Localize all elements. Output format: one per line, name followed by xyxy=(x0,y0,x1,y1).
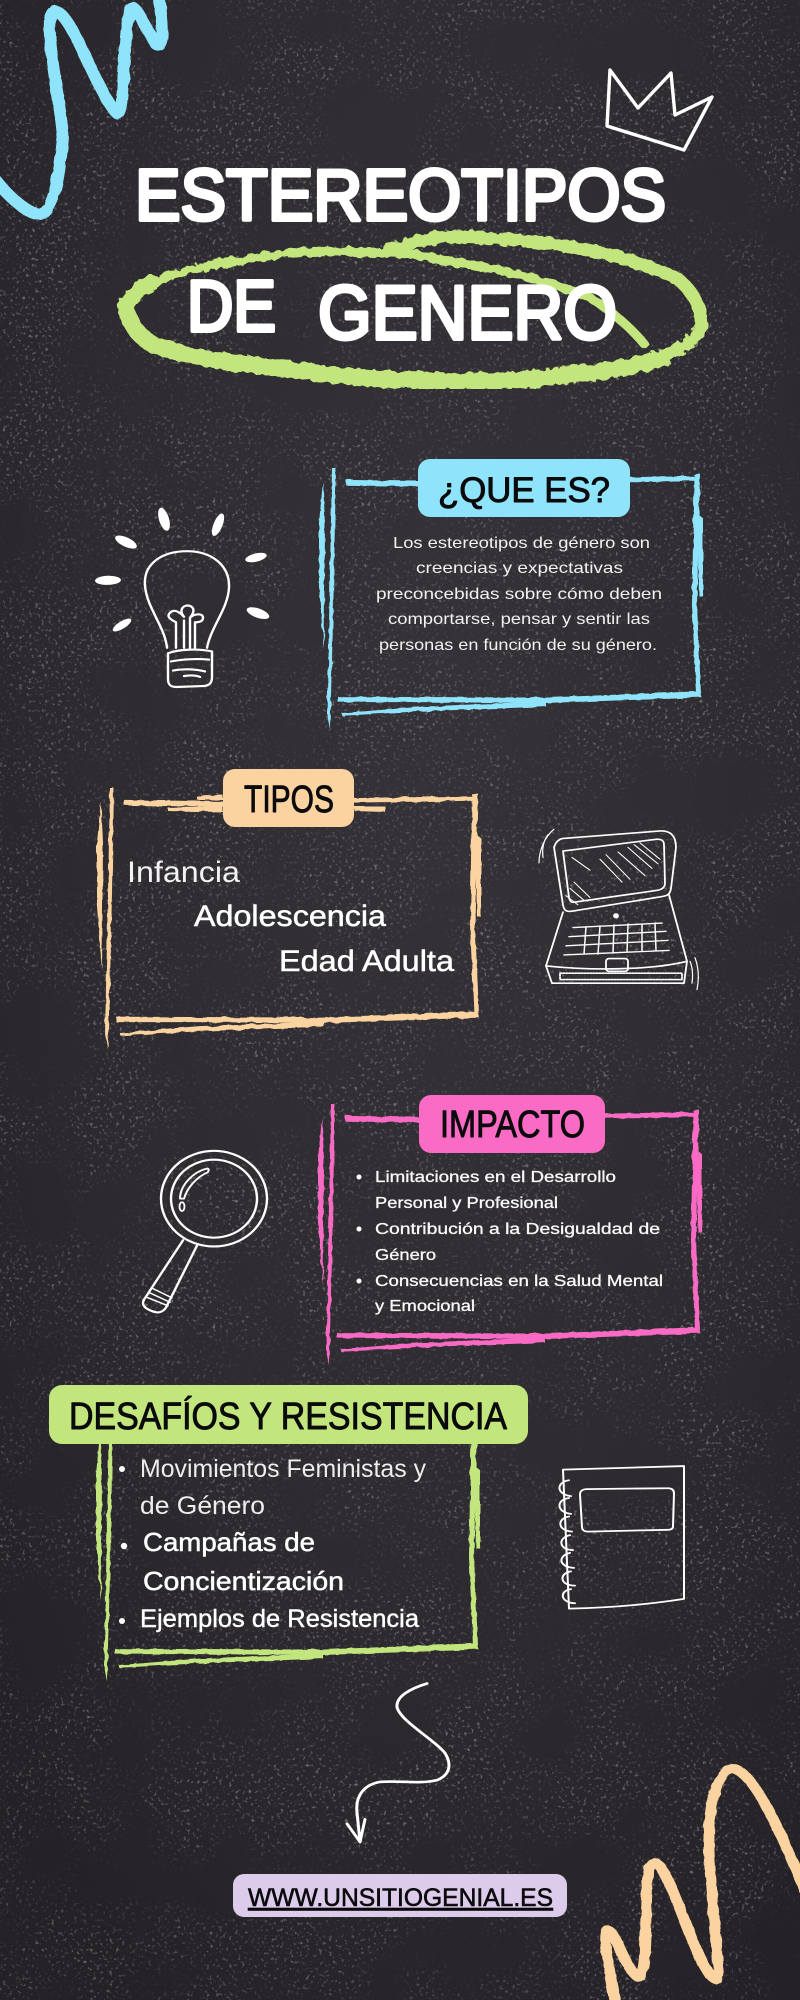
orange sketched frame xyxy=(97,788,481,1049)
icon: crown xyxy=(607,70,712,150)
arrow: pointing down to website xyxy=(347,1683,449,1842)
icon: notebook xyxy=(559,1466,684,1609)
decorative orange squiggle xyxy=(606,1769,800,2000)
type: Adolescencia: Adolescencia xyxy=(194,900,386,933)
blue sketched frame xyxy=(319,468,703,729)
badge: impacto xyxy=(419,1095,605,1153)
description text xyxy=(376,535,662,654)
title: ESTEREOTIPOS: ESTEREOTIPOS xyxy=(135,156,666,236)
heading: impacto: IMPACTO xyxy=(440,1104,585,1146)
icon: magnifying glass xyxy=(143,1151,267,1312)
panel: desafios y resistencia xyxy=(49,1385,528,1681)
title: DE GENERO: GENERO xyxy=(318,271,617,356)
impact bullet list: Contribución a la Desigualdad de xyxy=(375,1221,660,1238)
badge: que es xyxy=(418,459,630,517)
impact bullet list: Limitaciones en el Desarrollo xyxy=(375,1169,616,1186)
impact bullet list: Personal y Profesional xyxy=(375,1195,558,1212)
pink sketched frame xyxy=(318,1104,702,1365)
impact bullet list: Género xyxy=(375,1247,436,1264)
panel: impacto xyxy=(318,1095,702,1365)
description text: preconcebidas sobre cómo deben xyxy=(376,586,662,603)
description text: creencias y expectativas xyxy=(416,560,623,577)
title: DE GENERO: DE xyxy=(187,267,276,347)
title highlight: green scribbled ellipse xyxy=(126,236,701,381)
impact bullet list xyxy=(357,1169,663,1315)
heading: tipos: TIPOS xyxy=(244,779,334,821)
website url: WWW.UNSITIOGENIAL.ES xyxy=(248,1884,553,1912)
green sketched frame xyxy=(96,1420,480,1681)
impact bullet list: y Emocional xyxy=(375,1298,475,1315)
icon: light bulb xyxy=(95,507,271,687)
challenges bullet list xyxy=(119,1455,426,1633)
heading: desafios: DESAFÍOS Y RESISTENCIA xyxy=(69,1395,508,1438)
heading: que es: ¿QUE ES? xyxy=(438,471,610,510)
challenges bullet list: Movimientos Feministas y xyxy=(140,1455,426,1483)
challenges bullet list: Ejemplos de Resistencia xyxy=(140,1605,419,1633)
panel: que es xyxy=(319,459,703,729)
description text: Los estereotipos de género son xyxy=(393,535,650,552)
type: Infancia: Infancia xyxy=(127,856,240,889)
challenges bullet list: Concientización xyxy=(143,1566,344,1596)
website badge xyxy=(233,1874,567,1917)
description text: personas en función de su género. xyxy=(379,637,657,654)
icon: bulb rays xyxy=(95,507,271,634)
badge: desafios xyxy=(49,1385,528,1444)
decorative blue squiggle xyxy=(0,0,162,214)
type: Edad Adulta: Edad Adulta xyxy=(279,945,454,978)
badge: tipos xyxy=(223,769,354,827)
impact bullet list: Consecuencias en la Salud Mental xyxy=(375,1273,663,1290)
description text: comportarse, pensar y sentir las xyxy=(388,611,650,628)
icon: laptop xyxy=(539,829,698,990)
challenges bullet list: Campañas de xyxy=(143,1527,315,1557)
title: DE GENERO xyxy=(187,267,617,356)
panel: tipos xyxy=(97,769,481,1049)
challenges bullet list: de Género xyxy=(140,1492,265,1520)
